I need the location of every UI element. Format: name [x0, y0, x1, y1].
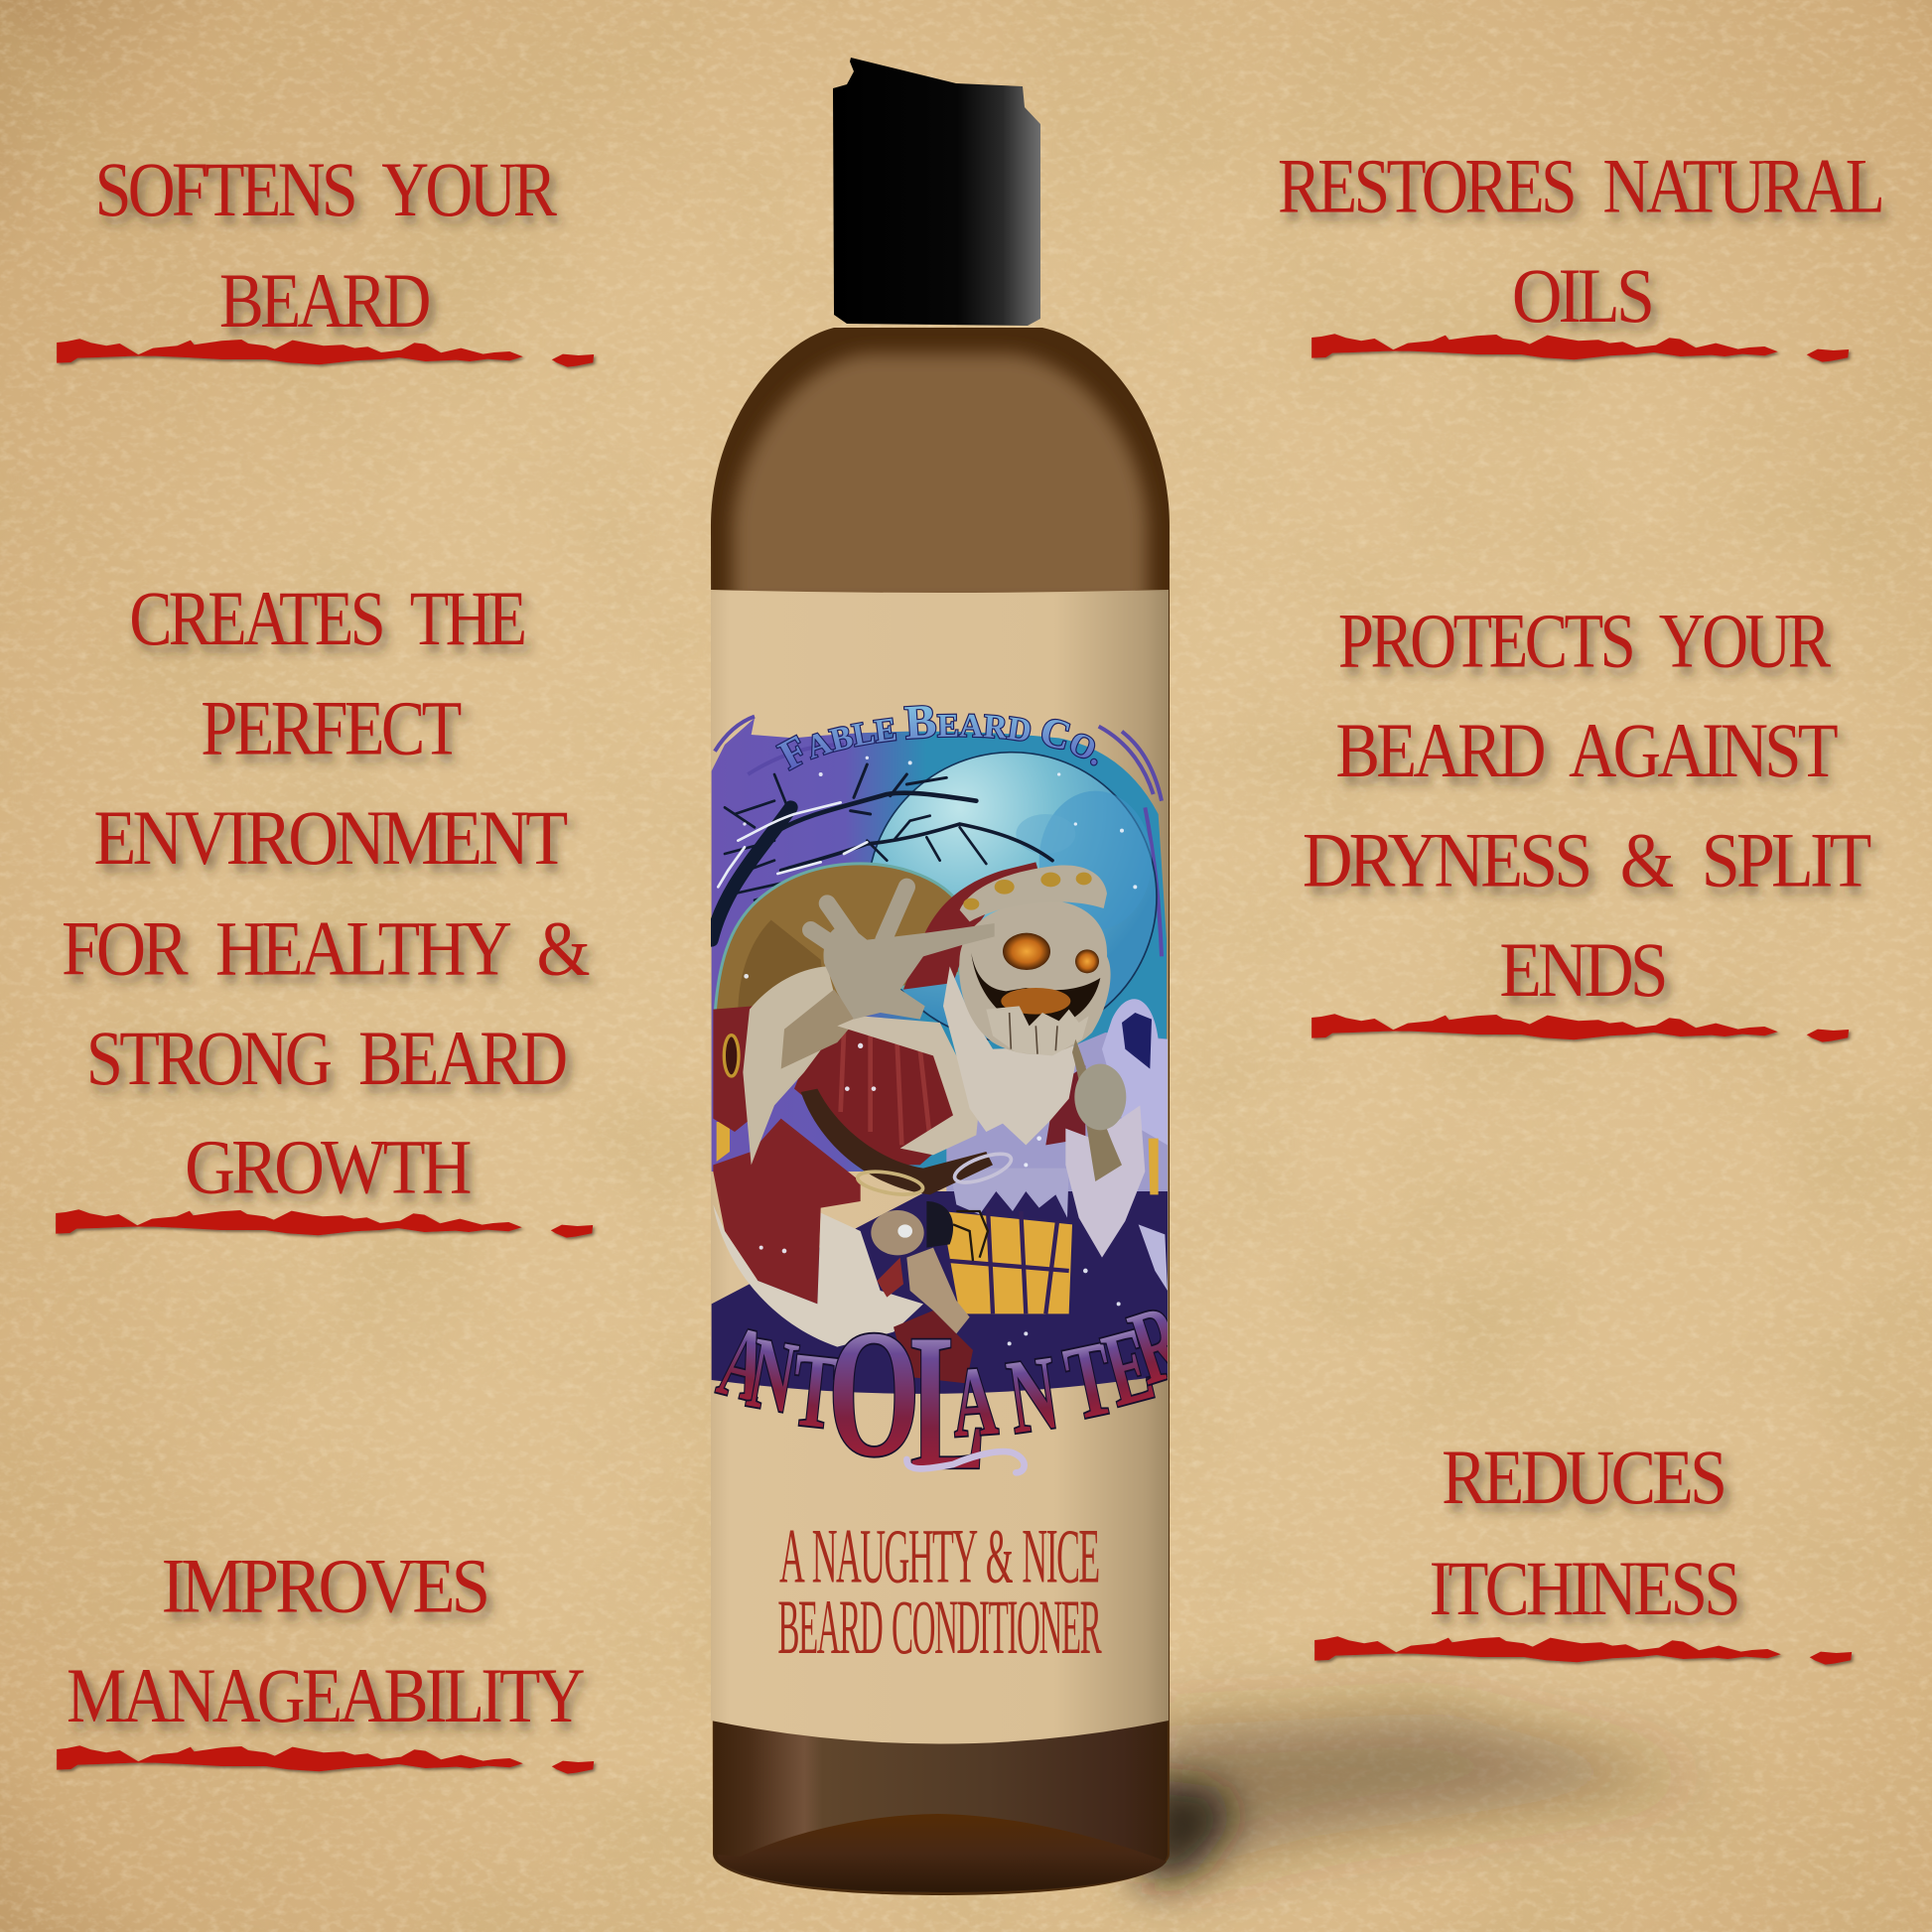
benefit: reduces itchiness: REDUCES — [1442, 1435, 1724, 1521]
label illustration — [711, 705, 1168, 1654]
benefit: reduces itchiness — [1430, 1435, 1737, 1632]
claw hand — [811, 887, 995, 1020]
bottle body — [711, 328, 1170, 1895]
sack — [715, 864, 960, 1026]
amber shoulder highlight — [733, 353, 1148, 606]
fur hat band with studs — [960, 865, 1107, 921]
benefit: softens your beard: SOFTENS YOUR — [95, 147, 557, 233]
navy lower scene — [712, 1191, 1168, 1394]
benefit: creates the perfect environment: CREATES THE — [129, 576, 524, 662]
snow on branches — [718, 802, 867, 887]
right sleeve fur — [1065, 1105, 1145, 1258]
right gold window sliver — [1149, 1139, 1159, 1194]
liquid dome — [717, 1814, 1167, 1892]
label — [711, 590, 1169, 1743]
right red sleeve — [1045, 1065, 1085, 1145]
benefit: restores natural oils — [1278, 143, 1881, 340]
benefit: protects your beard: PROTECTS YOUR — [1338, 598, 1831, 684]
santolantern title: A — [948, 1345, 1001, 1457]
santolantern title: N — [1002, 1334, 1064, 1456]
underline: reduces — [1314, 1636, 1852, 1665]
label illustration: A NAUGHTY & NICE — [779, 1512, 1099, 1598]
underline: softens — [57, 339, 594, 367]
product description — [777, 1512, 1102, 1670]
cap — [833, 58, 1040, 326]
bottle cast shadow — [1142, 1713, 1708, 1876]
benefit: creates the perfect environment: FOR HEALTHY & — [62, 906, 589, 993]
lit window — [941, 1208, 1072, 1313]
santolantern title: L — [910, 1294, 986, 1510]
creepy doll — [871, 1201, 988, 1333]
bottle — [711, 58, 1170, 1895]
santolantern title: T — [1056, 1319, 1123, 1444]
benefit: improves manageability: MANAGEABILITY — [67, 1653, 584, 1739]
benefit: creates the perfect environment: PERFECT — [201, 686, 461, 772]
right fist and rope — [1072, 1039, 1126, 1181]
benefit: improves manageability: IMPROVES — [162, 1543, 486, 1629]
benefit: creates the perfect environment: ENVIRONMENT — [93, 795, 567, 882]
benefit: restores natural oils: OILS — [1512, 253, 1651, 340]
arm fur sleeve — [743, 966, 834, 1165]
top arc swooshes — [715, 717, 1162, 956]
benefit: protects your beard: DRYNESS & SPLIT — [1303, 817, 1870, 903]
l swash — [906, 1451, 1025, 1472]
santolantern title: T — [786, 1331, 843, 1452]
pumpkin face — [959, 900, 1111, 1055]
night sky — [712, 718, 1167, 1172]
snowflakes — [743, 757, 1137, 1345]
santolantern title — [709, 1283, 1198, 1510]
benefit: softens your beard: BEARD — [219, 258, 429, 345]
santolantern title: R — [1118, 1283, 1198, 1408]
santolantern title: O — [828, 1294, 920, 1494]
red coat — [713, 1119, 861, 1304]
underline: creates — [56, 1209, 593, 1238]
benefit: creates the perfect environment: STRONG BEARD — [86, 1016, 566, 1102]
fur collar — [837, 1016, 980, 1155]
benefit: improves manageability — [67, 1543, 584, 1739]
left gold window sliver — [717, 1122, 730, 1162]
santolantern title: A — [709, 1305, 778, 1425]
benefit: protects your beard: ENDS — [1499, 927, 1665, 1014]
benefit: creates the perfect environment — [62, 576, 589, 1210]
label illustration: BEARD CONDITIONER — [777, 1584, 1102, 1670]
benefit: softens your beard — [95, 147, 557, 345]
red torso — [794, 1020, 970, 1165]
belt — [801, 1089, 993, 1194]
santolantern title: E — [1093, 1306, 1164, 1430]
moon — [868, 753, 1157, 1041]
dusk sky above window — [950, 1169, 1069, 1218]
underline: protects — [1311, 1014, 1849, 1042]
benefit: protects your beard — [1303, 598, 1870, 1014]
white beard — [943, 966, 1079, 1145]
santolantern title: N — [741, 1315, 804, 1435]
snow mound right — [1139, 1224, 1168, 1291]
fur trim and leg — [713, 1204, 923, 1347]
benefit: reduces itchiness: ITCHINESS — [1430, 1546, 1737, 1632]
red lower cloak — [894, 1311, 973, 1383]
fable beard co wordmark: FABLE BEARD CO. — [774, 705, 1098, 771]
lilac dusk background — [946, 1033, 1168, 1191]
benefit: protects your beard: BEARD AGAINST — [1335, 708, 1838, 794]
amber base — [714, 1713, 1168, 1892]
sack shading — [738, 920, 824, 1013]
santa hat — [903, 862, 1039, 990]
bare tree — [712, 764, 1052, 940]
underline: restores — [1311, 334, 1849, 362]
bottle shadow core — [1142, 1777, 1236, 1886]
shoulder cloth — [713, 1006, 753, 1132]
forearm — [781, 990, 857, 1069]
belt rings — [856, 1148, 1015, 1198]
underline: improves — [57, 1745, 594, 1774]
benefit: creates the perfect environment: GROWTH — [185, 1124, 471, 1210]
snowy hill and tower — [1102, 999, 1168, 1145]
gold ring — [724, 1035, 739, 1076]
